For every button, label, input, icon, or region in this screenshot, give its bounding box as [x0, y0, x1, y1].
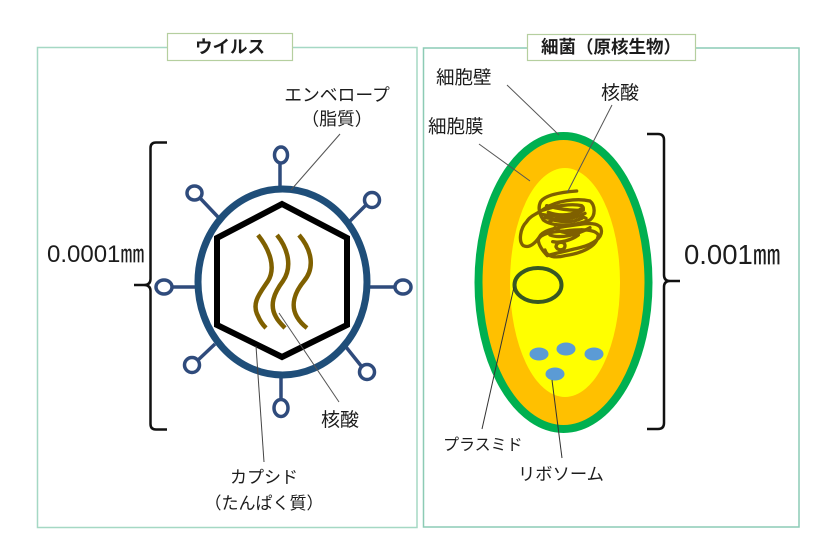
label: envelope: [284, 85, 390, 190]
label: plasmid: [443, 287, 523, 454]
heading: virus: [168, 34, 292, 60]
icon: cytoplasm: [510, 168, 620, 397]
label: bacterial nucleic acid: [567, 82, 639, 193]
bracket: virus scale: [134, 142, 167, 430]
label: envelope: エンベロープ: [284, 85, 390, 105]
label: bacterial nucleic acid: 核酸: [601, 82, 639, 104]
label: capsid: （たんぱく質）: [204, 494, 324, 513]
text: bacteria size: 0.001㎜: [684, 239, 780, 270]
label: envelope: （脂質）: [301, 109, 373, 129]
icon: virus spikes: [156, 147, 411, 416]
label: cell wall: 細胞壁: [436, 67, 492, 88]
bracket: bacteria scale: [647, 134, 680, 429]
icon: bacterial nucleic acid: [520, 191, 601, 257]
label: ribosome: リボソーム: [518, 464, 604, 484]
label: cell membrane: [428, 116, 530, 181]
icon: virus envelope: [198, 189, 367, 375]
label: virus nucleic acid: 核酸: [321, 409, 359, 431]
heading: virus: ウイルス: [195, 37, 265, 57]
label: ribosome: [518, 380, 604, 484]
heading: bacteria: 細菌（原核生物）: [541, 37, 681, 57]
label: capsid: カプシド: [230, 468, 298, 487]
label: virus nucleic acid: [279, 313, 359, 431]
icon: plasmid: [514, 268, 562, 302]
heading: bacteria: [528, 34, 696, 60]
label: capsid: [204, 346, 324, 513]
label: cell membrane: 細胞膜: [428, 116, 484, 137]
panel: bacteria: [424, 34, 799, 527]
panel: virus: [38, 34, 417, 528]
icon: capsid hexagon: [217, 204, 347, 357]
icon: viral nucleic acid: [255, 235, 311, 328]
icon: ribosomes: [530, 342, 604, 380]
icon: cell wall and membrane: [478, 136, 648, 429]
text: virus size: 0.0001㎜: [47, 241, 144, 268]
label: plasmid: プラスミド: [443, 436, 523, 454]
label: cell wall: [436, 67, 559, 135]
